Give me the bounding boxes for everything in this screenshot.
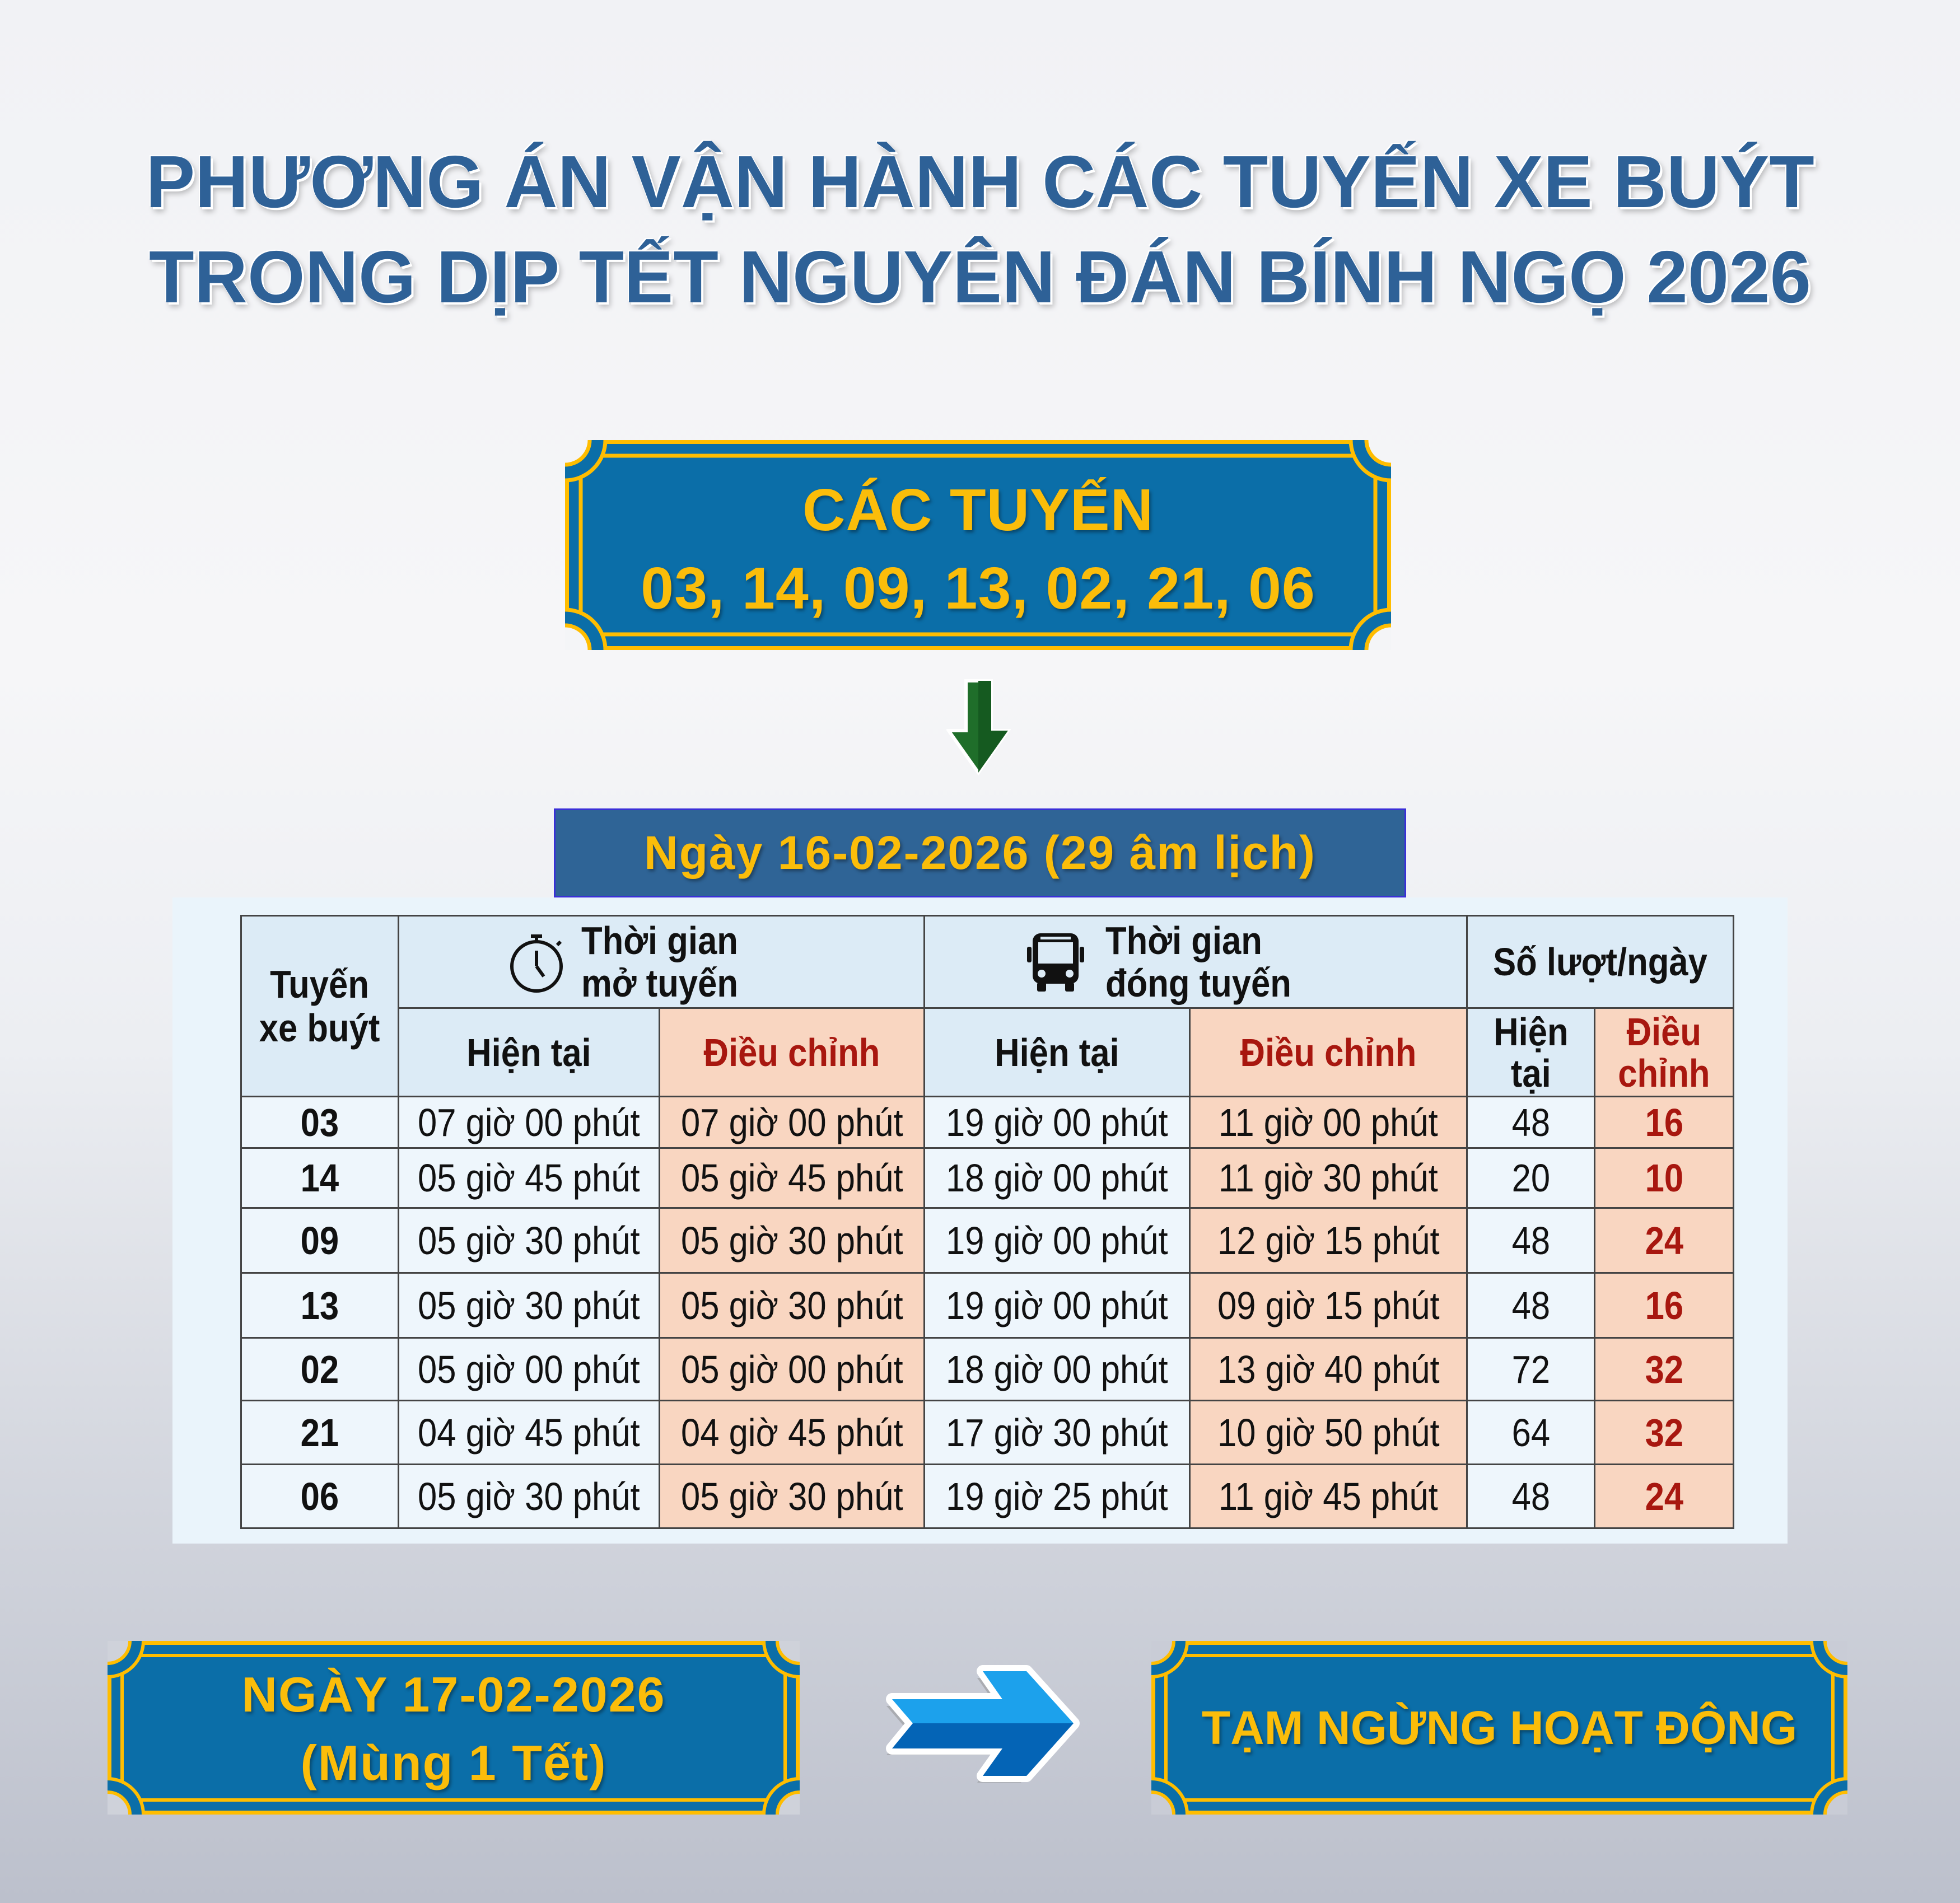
date bar: Ngày 16-02-2026 (29 âm lịch) bbox=[644, 826, 1316, 879]
box: suspended: TẠM NGỪNG HOẠT ĐỘNG bbox=[1202, 1701, 1797, 1754]
table: schedule: Điều chỉnh bbox=[704, 1030, 880, 1074]
box: routes list: CÁC TUYẾN bbox=[802, 477, 1154, 543]
box: date 17-02 bbox=[108, 1641, 800, 1815]
icon: bus bbox=[1027, 933, 1084, 992]
table: schedule: 19 giờ 00 phút bbox=[946, 1101, 1168, 1144]
table: schedule: 21 bbox=[301, 1411, 339, 1455]
table: schedule: 48 bbox=[1511, 1218, 1550, 1262]
table: schedule: 11 giờ 45 phút bbox=[1219, 1475, 1438, 1518]
table: schedule: 09 bbox=[301, 1218, 339, 1262]
table: schedule: 05 giờ 30 phút bbox=[681, 1283, 903, 1327]
table: schedule: 64 bbox=[1511, 1411, 1550, 1455]
table: schedule: 18 giờ 00 phút bbox=[946, 1156, 1168, 1200]
title bbox=[146, 140, 1820, 323]
box: date 17-02: NGÀY 17-02-2026 bbox=[241, 1667, 666, 1722]
table: schedule: chỉnh bbox=[1618, 1051, 1710, 1095]
table: schedule: Thời gian bbox=[581, 919, 738, 962]
table: schedule: Hiện tại bbox=[466, 1030, 591, 1074]
table: schedule: 32 bbox=[1645, 1347, 1683, 1391]
panel: table background bbox=[172, 897, 1788, 1544]
arrow: right bbox=[886, 1665, 1080, 1783]
table: schedule: 16 bbox=[1645, 1101, 1683, 1144]
title: PHƯƠNG ÁN VẬN HÀNH CÁC TUYẾN XE BUÝT bbox=[146, 141, 1814, 223]
table: schedule: 16 bbox=[1645, 1283, 1683, 1327]
box: date 17-02: (Mùng 1 Tết) bbox=[300, 1735, 607, 1790]
table: schedule: tại bbox=[1511, 1051, 1551, 1095]
table: schedule: 19 giờ 25 phút bbox=[946, 1475, 1168, 1518]
table: schedule: 24 bbox=[1645, 1218, 1683, 1262]
table: schedule: 03 bbox=[301, 1101, 339, 1144]
table: schedule: 48 bbox=[1511, 1283, 1550, 1327]
date bar bbox=[554, 808, 1406, 897]
table: schedule bbox=[240, 915, 1734, 1529]
table: schedule: mở tuyến bbox=[581, 961, 738, 1005]
table: schedule: 09 giờ 15 phút bbox=[1217, 1283, 1439, 1327]
table: schedule: 48 bbox=[1511, 1475, 1550, 1518]
table: schedule: 19 giờ 00 phút bbox=[946, 1283, 1168, 1327]
table: schedule: 02 bbox=[301, 1347, 339, 1391]
table: schedule: 05 giờ 00 phút bbox=[681, 1347, 903, 1391]
table: schedule: 05 giờ 30 phút bbox=[681, 1475, 903, 1518]
table: schedule: 04 giờ 45 phút bbox=[681, 1411, 903, 1455]
arrow: down bbox=[946, 679, 1011, 775]
table: schedule: Hiện tại bbox=[995, 1030, 1119, 1074]
table: schedule: 72 bbox=[1511, 1347, 1550, 1391]
table: schedule: 19 giờ 00 phút bbox=[946, 1218, 1168, 1262]
table: schedule: 05 giờ 30 phút bbox=[418, 1475, 640, 1518]
table: schedule: 04 giờ 45 phút bbox=[418, 1411, 640, 1455]
table: schedule: 05 giờ 30 phút bbox=[681, 1218, 903, 1262]
table: schedule: 05 giờ 30 phút bbox=[418, 1283, 640, 1327]
table: schedule: Hiện bbox=[1494, 1010, 1568, 1054]
table: schedule: Điều bbox=[1627, 1010, 1701, 1054]
table: schedule: Thời gian bbox=[1105, 919, 1262, 962]
table: schedule: 10 giờ 50 phút bbox=[1217, 1411, 1439, 1455]
table: schedule: 17 giờ 30 phút bbox=[946, 1411, 1168, 1455]
table: schedule: 10 bbox=[1645, 1156, 1683, 1200]
table: schedule: 07 giờ 00 phút bbox=[418, 1101, 640, 1144]
table: schedule: 13 bbox=[301, 1283, 339, 1327]
table: schedule: Tuyến bbox=[270, 962, 369, 1006]
table: schedule: 24 bbox=[1645, 1475, 1683, 1518]
table: schedule: 07 giờ 00 phút bbox=[681, 1101, 903, 1144]
table: schedule: 32 bbox=[1645, 1411, 1683, 1455]
box: suspended bbox=[1151, 1641, 1847, 1815]
table: schedule: 11 giờ 00 phút bbox=[1219, 1101, 1438, 1144]
table: schedule: 12 giờ 15 phút bbox=[1217, 1218, 1439, 1262]
table: schedule: 48 bbox=[1511, 1101, 1550, 1144]
table: schedule: 13 giờ 40 phút bbox=[1217, 1347, 1439, 1391]
table: schedule: 20 bbox=[1511, 1156, 1550, 1200]
table: schedule: 05 giờ 30 phút bbox=[418, 1218, 640, 1262]
table: schedule: 05 giờ 45 phút bbox=[681, 1156, 903, 1200]
table: schedule: xe buýt bbox=[259, 1006, 380, 1050]
table: schedule: 05 giờ 45 phút bbox=[418, 1156, 640, 1200]
table: schedule: 11 giờ 30 phút bbox=[1219, 1156, 1438, 1200]
table: schedule: 05 giờ 00 phút bbox=[418, 1347, 640, 1391]
title: TRONG DỊP TẾT NGUYÊN ĐÁN BÍNH NGỌ 2026 bbox=[149, 236, 1811, 318]
table: schedule: Điều chỉnh bbox=[1240, 1030, 1416, 1074]
table: schedule: 14 bbox=[301, 1156, 339, 1200]
icon: stopwatch bbox=[510, 934, 563, 993]
table: schedule: 06 bbox=[301, 1475, 339, 1518]
table: schedule: đóng tuyến bbox=[1105, 961, 1291, 1005]
box: routes list: 03, 14, 09, 13, 02, 21, 06 bbox=[641, 555, 1315, 621]
box: routes list bbox=[565, 440, 1391, 650]
table: schedule: Số lượt/ngày bbox=[1493, 940, 1707, 984]
table: schedule: 18 giờ 00 phút bbox=[946, 1347, 1168, 1391]
